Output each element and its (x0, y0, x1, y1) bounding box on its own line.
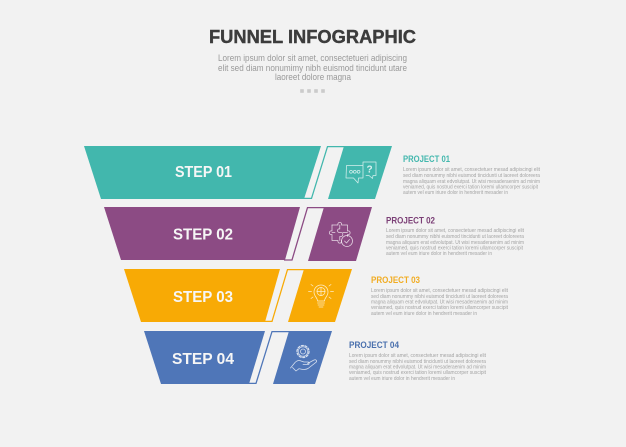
body copy: veniamed, quis nostrud exerci tation loremi ullamcorper suscipit (386, 246, 523, 252)
icon: speech bubbles (346, 162, 376, 183)
heading: PROJECT 01 (403, 154, 450, 164)
body copy: Lorem ipsum dolor sit amet, consectetuer mesad adipiscingi elit (386, 228, 524, 234)
body copy: Lorem ipsum dolor sit amet, consectetuer mesad adipiscingi elit (403, 167, 540, 173)
funnel step 4 (144, 331, 332, 384)
project 1 text (403, 154, 541, 196)
body copy: autem vel eum iriure dolor in hendrerit mesader in (371, 311, 477, 317)
heading: PROJECT 04 (349, 340, 400, 350)
subtitle text: laoreet dolore magna (275, 72, 352, 82)
body copy (371, 288, 509, 317)
main segment: step 01 (84, 146, 321, 199)
body copy (403, 167, 541, 196)
body copy: sed diam nonummy nibhi euismod tincidunti ut laoreet doloreera (371, 294, 509, 300)
main segment: step 03 (124, 269, 280, 322)
body copy: magna aliquam erat edvolutpat. Ut wisi mesaderaenim ad minim (371, 300, 508, 306)
body copy: magna aliquam erat edvolutpat. Ut wisi mesaderaenim ad minim (349, 364, 486, 370)
separator outline (303, 147, 345, 198)
step label: STEP 04 (172, 351, 234, 368)
separator outline (248, 332, 290, 383)
heading: PROJECT 03 (371, 275, 420, 285)
body copy: autem vel eum iriure dolor in hendrerit mesader in (349, 376, 455, 382)
icon: speech bubbles: ? (366, 164, 373, 176)
body copy: veniamed, quis nostrud exerci tation loremi ullamcorper suscipit (371, 305, 508, 311)
project 3 text (371, 275, 509, 317)
main segment: step 04 (144, 331, 265, 384)
heading: PROJECT 02 (386, 216, 435, 226)
body copy: veniamed, quis nostrud exerci tation loremi ullamcorper suscipit (403, 184, 538, 190)
subtitle text: elit sed diam nonumimy nibh euismod tincidunt utare (218, 63, 407, 73)
project 2 text (386, 216, 525, 257)
step label: STEP 03 (173, 289, 233, 306)
body copy: magna aliquam erat edvolutpat. Ut wisi mesaderaenim ad minim (403, 179, 540, 185)
icon panel (288, 269, 352, 322)
body copy: sed diam nonummy nibhi euismod tincidunti ut laoreet doloreera (386, 234, 525, 240)
body copy (349, 353, 487, 382)
funnel step 2 (104, 207, 372, 261)
separator outline (264, 270, 305, 321)
separator outline (284, 208, 325, 260)
icon panel (328, 146, 392, 199)
pagination dots (300, 89, 325, 93)
body copy: Lorem ipsum dolor sit amet, consectetuer mesad adipiscingi elit (371, 288, 508, 294)
title: FUNNEL INFOGRAPHIC (209, 27, 416, 47)
body copy: autem vel eum iriure dolor in hendrerit mesader in (403, 190, 508, 196)
icon: gear over hand (290, 346, 317, 371)
funnel step 3 (124, 269, 352, 322)
body copy: magna aliquam erat edvolutpat. Ut wisi mesaderaenim ad minim (386, 240, 524, 246)
subtitle text: Lorem ipsum dolor sit amet, consectetueri adipiscing (218, 53, 407, 63)
icon: puzzle with check (329, 222, 352, 246)
body copy: Lorem ipsum dolor sit amet, consectetuer mesad adipiscingi elit (349, 353, 486, 359)
body copy: veniamed, quis nostrud exerci tation loremi ullamcorper suscipit (349, 370, 486, 376)
body copy (386, 228, 525, 257)
main segment: step 02 (104, 207, 300, 260)
funnel step 1 (84, 146, 392, 199)
icon panel (273, 331, 332, 384)
body copy: sed diam nonummy nibhi euismod tincidunti ut laoreet doloreera (349, 359, 487, 365)
body copy: autem vel eum iriure dolor in hendrerit mesader in (386, 251, 492, 257)
step label: STEP 02 (173, 226, 233, 244)
icon: light bulb (308, 284, 334, 307)
project 4 text (349, 340, 487, 382)
step label: STEP 01 (175, 164, 232, 181)
subtitle text (218, 53, 407, 82)
icon panel (308, 207, 372, 261)
body copy: sed diam nonummy nibhi euismod tincidunti ut laoreet doloreera (403, 173, 541, 179)
